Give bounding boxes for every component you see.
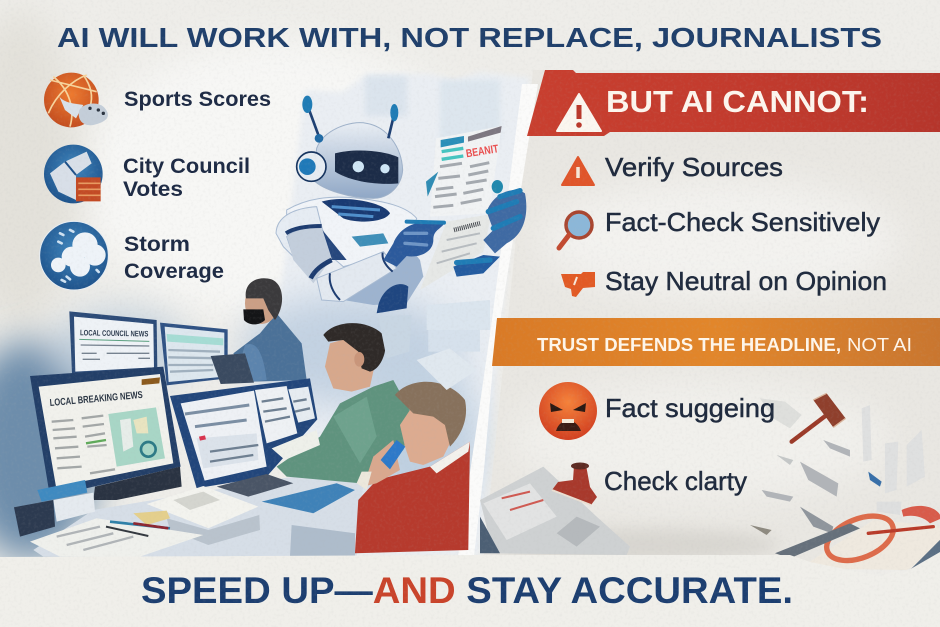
robot <box>276 96 526 330</box>
debris fragments <box>750 398 882 535</box>
icon: magnifier <box>559 212 592 248</box>
monitor: local council news: LOCAL COUNCIL NEWS <box>80 328 149 339</box>
monitor: side dashboard <box>160 323 228 385</box>
banner: trust defends the headline: NOT AI <box>847 334 912 355</box>
target sheet <box>800 520 940 570</box>
tagline: SPEED UP—AND STAY ACCURATE. <box>141 570 793 611</box>
text: stay neutral on opinion: Stay Neutral on Opinion <box>605 266 887 296</box>
laptop keyboard <box>217 474 293 497</box>
label: storm coverage: Storm <box>124 233 190 256</box>
icon: gavel <box>792 393 846 442</box>
map printouts <box>378 303 480 390</box>
banner: but AI cannot: BUT AI CANNOT: <box>606 84 869 119</box>
list: what AI cannot do <box>559 152 887 297</box>
bottom right strip paper <box>895 552 940 627</box>
robot antennas <box>302 96 398 143</box>
icon: storm coverage <box>40 221 108 290</box>
newspaper held by robot: BEANIT <box>465 143 499 160</box>
person: reporter on phone in red <box>355 382 470 553</box>
torn paper behind robot <box>240 72 530 555</box>
text: fact-check sensitively: Fact-Check Sensitively <box>605 207 880 237</box>
monitor: local breaking news: LOCAL BREAKING NEWS <box>49 390 143 409</box>
icon: thumbs down <box>561 272 595 297</box>
printout map <box>427 300 490 330</box>
desk <box>33 477 363 557</box>
banner: trust defends the headline <box>492 318 940 366</box>
book <box>262 483 355 513</box>
label: city council votes: Votes <box>123 178 183 201</box>
section: newsroom scene <box>14 278 480 557</box>
icon: sports scores <box>44 73 108 127</box>
label: city council votes: City Council <box>123 155 250 178</box>
banner: but AI cannot <box>527 70 940 136</box>
desk shadow <box>290 525 355 557</box>
desk objects: card holder and box <box>14 480 95 537</box>
monitor: local breaking news <box>30 367 182 500</box>
ruined skyline <box>862 405 925 493</box>
monitor: article draft <box>170 378 317 488</box>
crumpled newspapers <box>480 467 630 555</box>
text: check clarty: Check clarty <box>604 466 747 496</box>
icon: angry face <box>539 382 597 440</box>
robot head <box>297 123 403 198</box>
keyboard <box>775 523 860 558</box>
left storm cloud backdrop <box>0 310 190 560</box>
label: sports scores: Sports Scores <box>124 88 271 111</box>
laptop <box>211 353 254 384</box>
text: fact suggeing: Fact suggeing <box>605 393 775 423</box>
robot hands <box>383 180 526 277</box>
icon: alert <box>562 157 594 185</box>
monitor: local council news <box>69 311 157 373</box>
label: storm coverage: Coverage <box>124 260 224 283</box>
text: verify sources: Verify Sources <box>605 152 783 182</box>
robot torso <box>287 197 423 313</box>
banner: trust defends the headline: TRUST DEFENDS THE HEADLINE, <box>537 334 841 355</box>
icon: rubber stamp <box>552 462 597 505</box>
newspaper held by robot <box>426 126 502 217</box>
bottom strip paper <box>0 555 900 627</box>
right panel paper <box>484 70 940 570</box>
diagonal white divider <box>458 84 538 556</box>
section: debris illustration <box>480 393 940 570</box>
person: reporter in green <box>272 323 413 483</box>
target and dart <box>820 502 940 569</box>
title: AI WILL WORK WITH, NOT REPLACE, JOURNALISTS <box>57 22 882 53</box>
dark corner rubble <box>910 533 940 570</box>
icon: city council votes <box>44 145 103 203</box>
documents and pens <box>30 486 260 557</box>
tablet page <box>420 214 492 290</box>
icon: warning triangle <box>557 94 601 131</box>
person: bearded reporter <box>233 278 307 382</box>
robot left arm <box>276 207 397 302</box>
